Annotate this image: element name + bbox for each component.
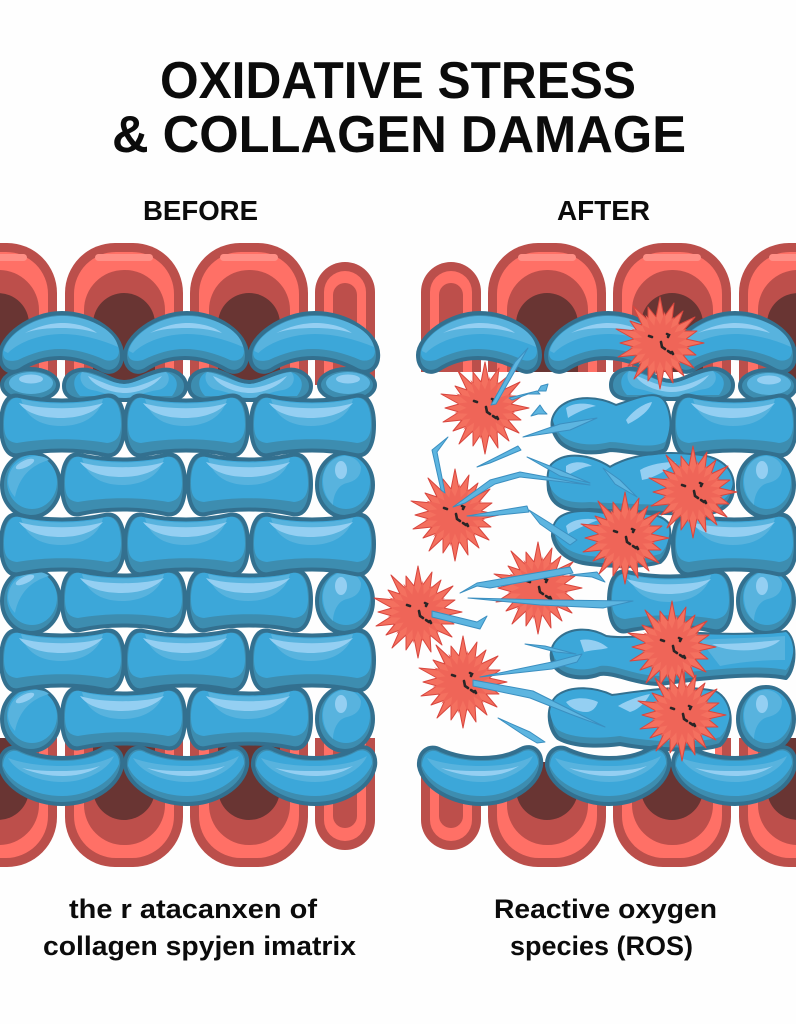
ROS particle — [374, 566, 462, 658]
ROS particle — [638, 669, 726, 761]
collagen tile rows — [0, 313, 378, 804]
ROS particle — [494, 542, 582, 634]
collagen shards — [432, 348, 637, 743]
caption: after: Reactive oxygen — [494, 894, 717, 924]
ROS particle — [441, 362, 529, 454]
title: & COLLAGEN DAMAGE — [112, 106, 686, 164]
red muscle cells — [380, 243, 796, 867]
ROS particle — [411, 469, 499, 561]
ROS particle — [419, 636, 507, 728]
panel: after — [374, 243, 796, 867]
caption: before: the r atacanxen of — [69, 894, 318, 924]
red muscle cells — [0, 243, 380, 867]
broken collagen shards and ROS particles — [374, 297, 737, 761]
title — [112, 52, 686, 164]
caption: after — [494, 894, 717, 961]
ROS particle — [581, 492, 669, 584]
ROS particle — [616, 297, 704, 389]
caption: before — [43, 894, 356, 961]
ROS particle — [649, 446, 737, 538]
title: OXIDATIVE STRESS — [160, 52, 636, 110]
panel: before — [0, 243, 380, 867]
caption: after: species (ROS) — [510, 931, 693, 961]
ROS particle — [628, 601, 716, 693]
heading: after: AFTER — [557, 195, 650, 226]
intact and damaged collagen — [418, 313, 796, 804]
heading: before: BEFORE — [143, 195, 258, 226]
caption: before: collagen spyjen imatrix — [43, 931, 356, 961]
